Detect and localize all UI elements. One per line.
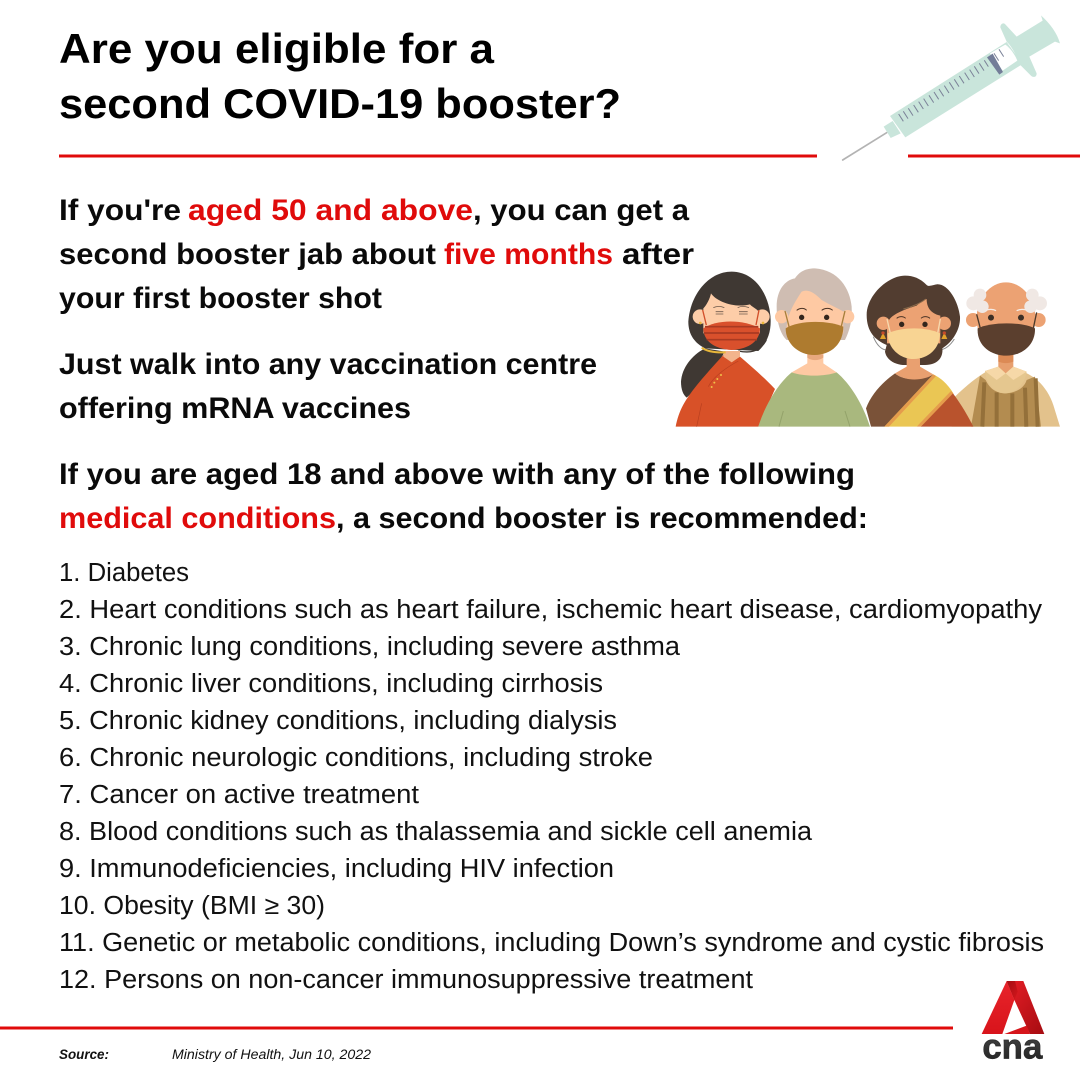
list: medical conditions: 2. Heart conditions such as heart failure, ischemic heart disease, cardiomyopathy: [59, 596, 1042, 624]
source: [59, 1047, 372, 1062]
list: medical conditions: [59, 559, 1044, 994]
text block: aged 50 and above: after: [622, 238, 694, 271]
logo: cna: [982, 981, 1044, 1066]
text block: aged 50 and above: [59, 194, 694, 315]
text block: aged 18 and above: , a second booster is recommended:: [336, 502, 868, 535]
divider: footer rule: [0, 1026, 953, 1030]
person 1: woman in red: [676, 272, 775, 427]
list: medical conditions: 12. Persons on non-cancer immunosuppressive treatment: [59, 966, 753, 994]
list: medical conditions: 3. Chronic lung conditions, including severe asthma: [59, 633, 681, 661]
source: Source:: [59, 1047, 109, 1062]
list: medical conditions: 5. Chronic kidney conditions, including dialysis: [59, 707, 617, 735]
person 3: woman in sari: [866, 276, 973, 427]
icon: syringe: [843, 15, 1060, 160]
title: [59, 25, 621, 127]
list: medical conditions: 10. Obesity (BMI ≥ 30): [59, 892, 325, 920]
text block: aged 50 and above: If you're: [59, 194, 181, 227]
illustration: four masked people: [676, 268, 1060, 427]
text block: aged 18 and above: [59, 458, 868, 535]
list: medical conditions: 4. Chronic liver conditions, including cirrhosis: [59, 670, 603, 698]
list: medical conditions: 8. Blood conditions such as thalassemia and sickle cell anemia: [59, 818, 813, 846]
text block: aged 50 and above: your first booster shot: [59, 282, 382, 315]
text block: aged 50 and above: second booster jab about: [59, 238, 436, 271]
list: medical conditions: 1. Diabetes: [59, 559, 189, 587]
text block: aged 18 and above: If you are aged 18 and above with any of the following: [59, 458, 855, 491]
list: medical conditions: 7. Cancer on active treatment: [59, 781, 419, 809]
list: medical conditions: 6. Chronic neurologic conditions, including stroke: [59, 744, 653, 772]
person 2: elderly woman: [758, 268, 870, 427]
text block: aged 18 and above: medical conditions: [59, 502, 336, 535]
list: medical conditions: 11. Genetic or metabolic conditions, including Down’s syndrome and cystic fibrosis: [59, 929, 1044, 957]
text block: aged 50 and above: aged 50 and above: [188, 194, 473, 227]
text block: aged 50 and above: , you can get a: [473, 194, 689, 227]
divider: header rule: [59, 154, 1080, 158]
title: second COVID-19 booster?: [59, 80, 621, 127]
person 4: elderly man: [952, 282, 1060, 427]
text block: walk in: Just walk into any vaccination centre: [59, 348, 597, 381]
source: Ministry of Health, Jun 10, 2022: [172, 1047, 372, 1062]
list: medical conditions: 9. Immunodeficiencies, including HIV infection: [59, 855, 614, 883]
text block: aged 50 and above: five months: [444, 238, 613, 271]
text block: walk in: offering mRNA vaccines: [59, 392, 411, 425]
logo: cna: cna: [982, 1027, 1043, 1066]
text block: walk in: [59, 348, 597, 425]
title: Are you eligible for a: [59, 25, 495, 72]
